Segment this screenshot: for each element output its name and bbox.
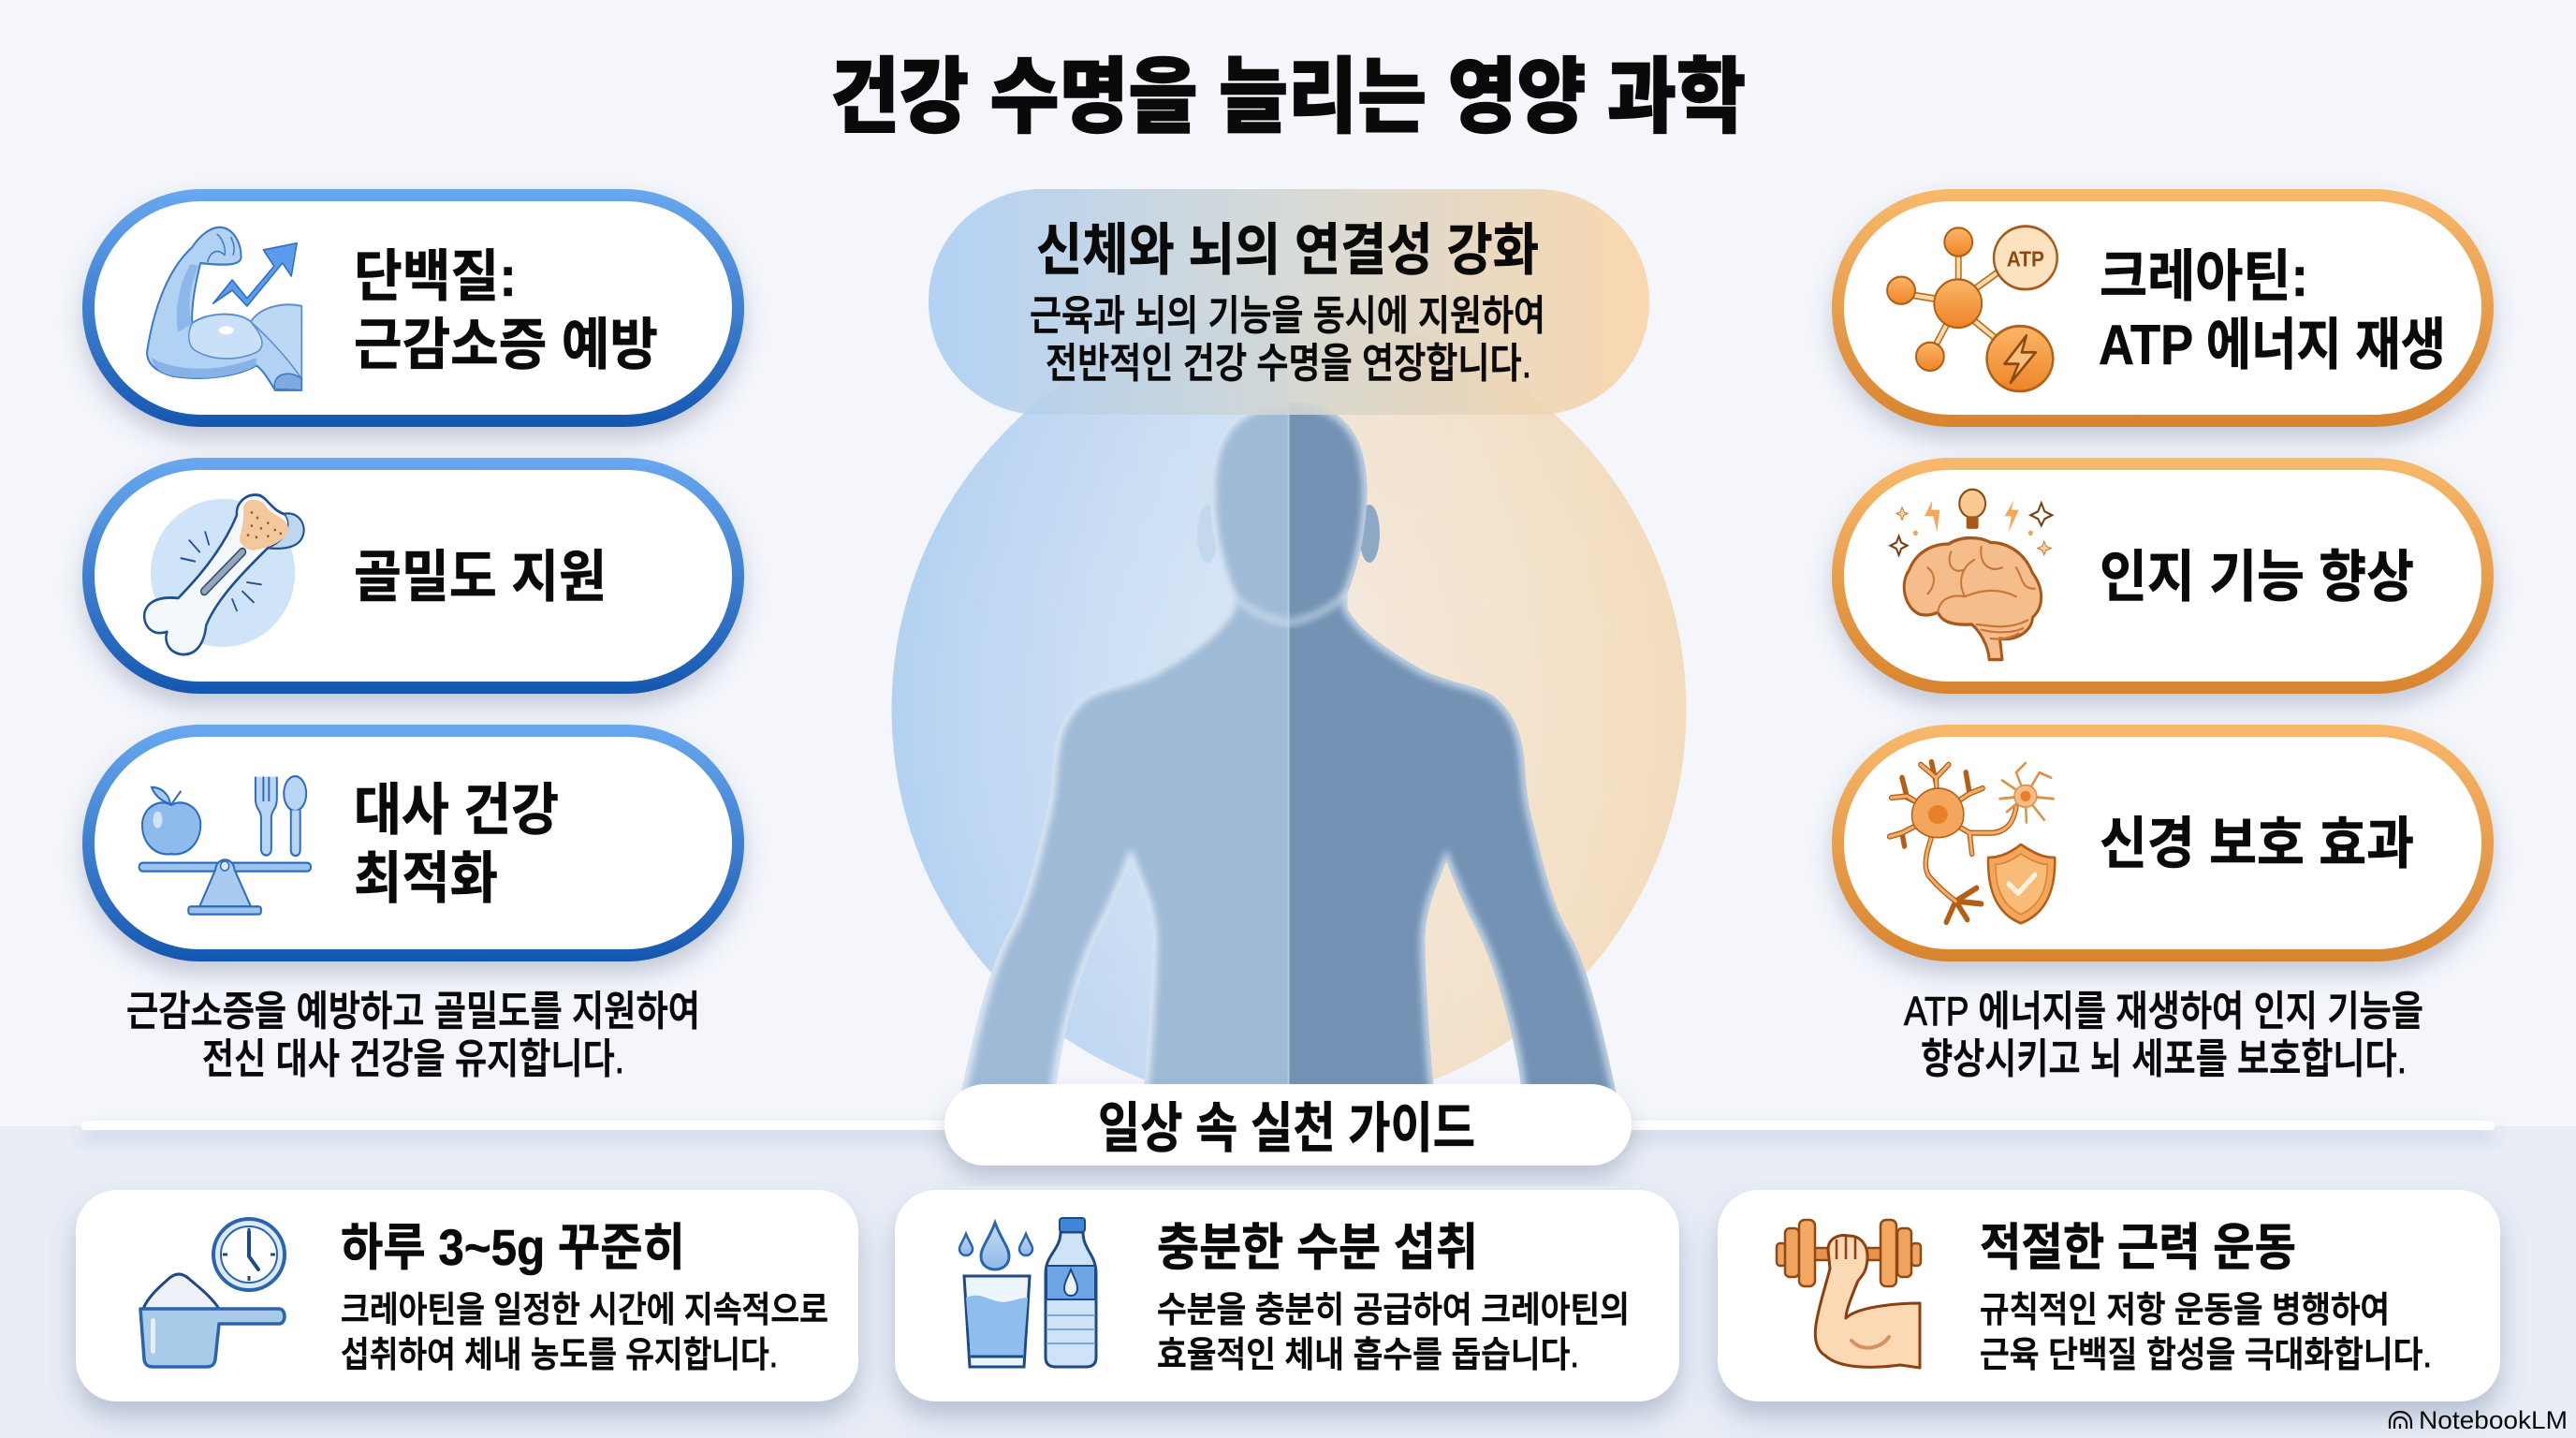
card text: 규칙적인 저항 운동을 병행하여 [1980,1291,2390,1330]
section divider bar [81,1121,2495,1130]
icon: arm with dumbbell [1777,1220,1921,1368]
card text: 크레아틴을 일정한 시간에 지속적으로 [341,1291,828,1330]
right caption: ATP 에너지를 재생하여 인지 기능을 [1904,989,2423,1034]
card text [1980,1291,2432,1375]
label: 근감소증 예방 [354,314,658,376]
central figure: circle and body [891,402,1687,1093]
icon: bone [144,495,303,654]
panel: protein muscle [82,189,744,427]
title: 건강 수명을 늘리는 영양 과학 [830,51,1746,143]
label: 인지 기능 향상 [2100,546,2414,609]
icon: molecule with ATP and bolt: ATP [2007,246,2044,271]
panel: metabolic health [82,725,744,961]
central description: 근육과 뇌의 기능을 동시에 지원하여 [1030,293,1545,339]
card text: 섭취하여 체내 농도를 유지합니다. [341,1336,778,1375]
card: daily dose [76,1190,858,1401]
label [2099,245,2446,376]
label: 대사 건강 [354,779,559,842]
icon: scoop and clock [140,1219,285,1367]
label [354,245,658,376]
right caption [1904,989,2423,1082]
icon: apple and cutlery balance [139,776,311,915]
icon: brain with bulb and sparks [1891,490,2052,660]
label: 골밀도 지원 [354,546,607,609]
central description [1030,293,1545,387]
card text: 근육 단백질 합성을 극대화합니다. [1980,1336,2432,1375]
panel: central message [929,189,1649,415]
label: ATP 에너지 재생 [2099,314,2446,376]
icon: neurons with shield [1890,762,2055,923]
card text [1157,1291,1630,1375]
label: 단백질: [354,245,517,308]
icon: molecule with ATP and bolt [1887,227,2057,391]
panel: neuroprotection [1832,725,2494,961]
card text [341,1291,828,1375]
icon: flexed arm with arrow [147,227,301,390]
bottom band background [0,1126,2576,1438]
card heading: 충분한 수분 섭취 [1157,1220,1478,1276]
section heading pill [944,1084,1632,1166]
panel: bone density [82,458,744,694]
card: strength training [1718,1190,2500,1401]
central heading: 신체와 뇌의 연결성 강화 [1036,219,1539,282]
card heading: 적절한 근력 운동 [1980,1220,2296,1276]
panel: creatine ATP [1832,189,2494,427]
left caption [126,989,700,1082]
label: 최적화 [354,847,498,910]
section heading text: 일상 속 실천 가이드 [1098,1098,1475,1159]
icon: water glass, drops and bottle [959,1218,1096,1367]
label: 신경 보호 효과 [2100,813,2414,875]
background circle [891,313,1687,1107]
right caption: 향상시키고 뇌 세포를 보호합니다. [1921,1036,2407,1082]
card heading: 하루 3~5g 꾸준히 [341,1220,685,1276]
card: hydration [895,1190,1679,1401]
left caption: 전신 대사 건강을 유지합니다. [202,1036,624,1082]
central description: 전반적인 건강 수명을 연장합니다. [1046,341,1531,387]
label [354,779,559,910]
card text: 수분을 충분히 공급하여 크레아틴의 [1157,1291,1630,1330]
label: 크레아틴: [2100,245,2308,308]
body silhouette [959,402,1618,1105]
left caption: 근감소증을 예방하고 골밀도를 지원하여 [126,989,700,1034]
NotebookLM watermark: NotebookLM [2419,1406,2568,1434]
panel: cognition [1832,458,2494,694]
card text: 효율적인 체내 흡수를 돕습니다. [1157,1336,1579,1375]
